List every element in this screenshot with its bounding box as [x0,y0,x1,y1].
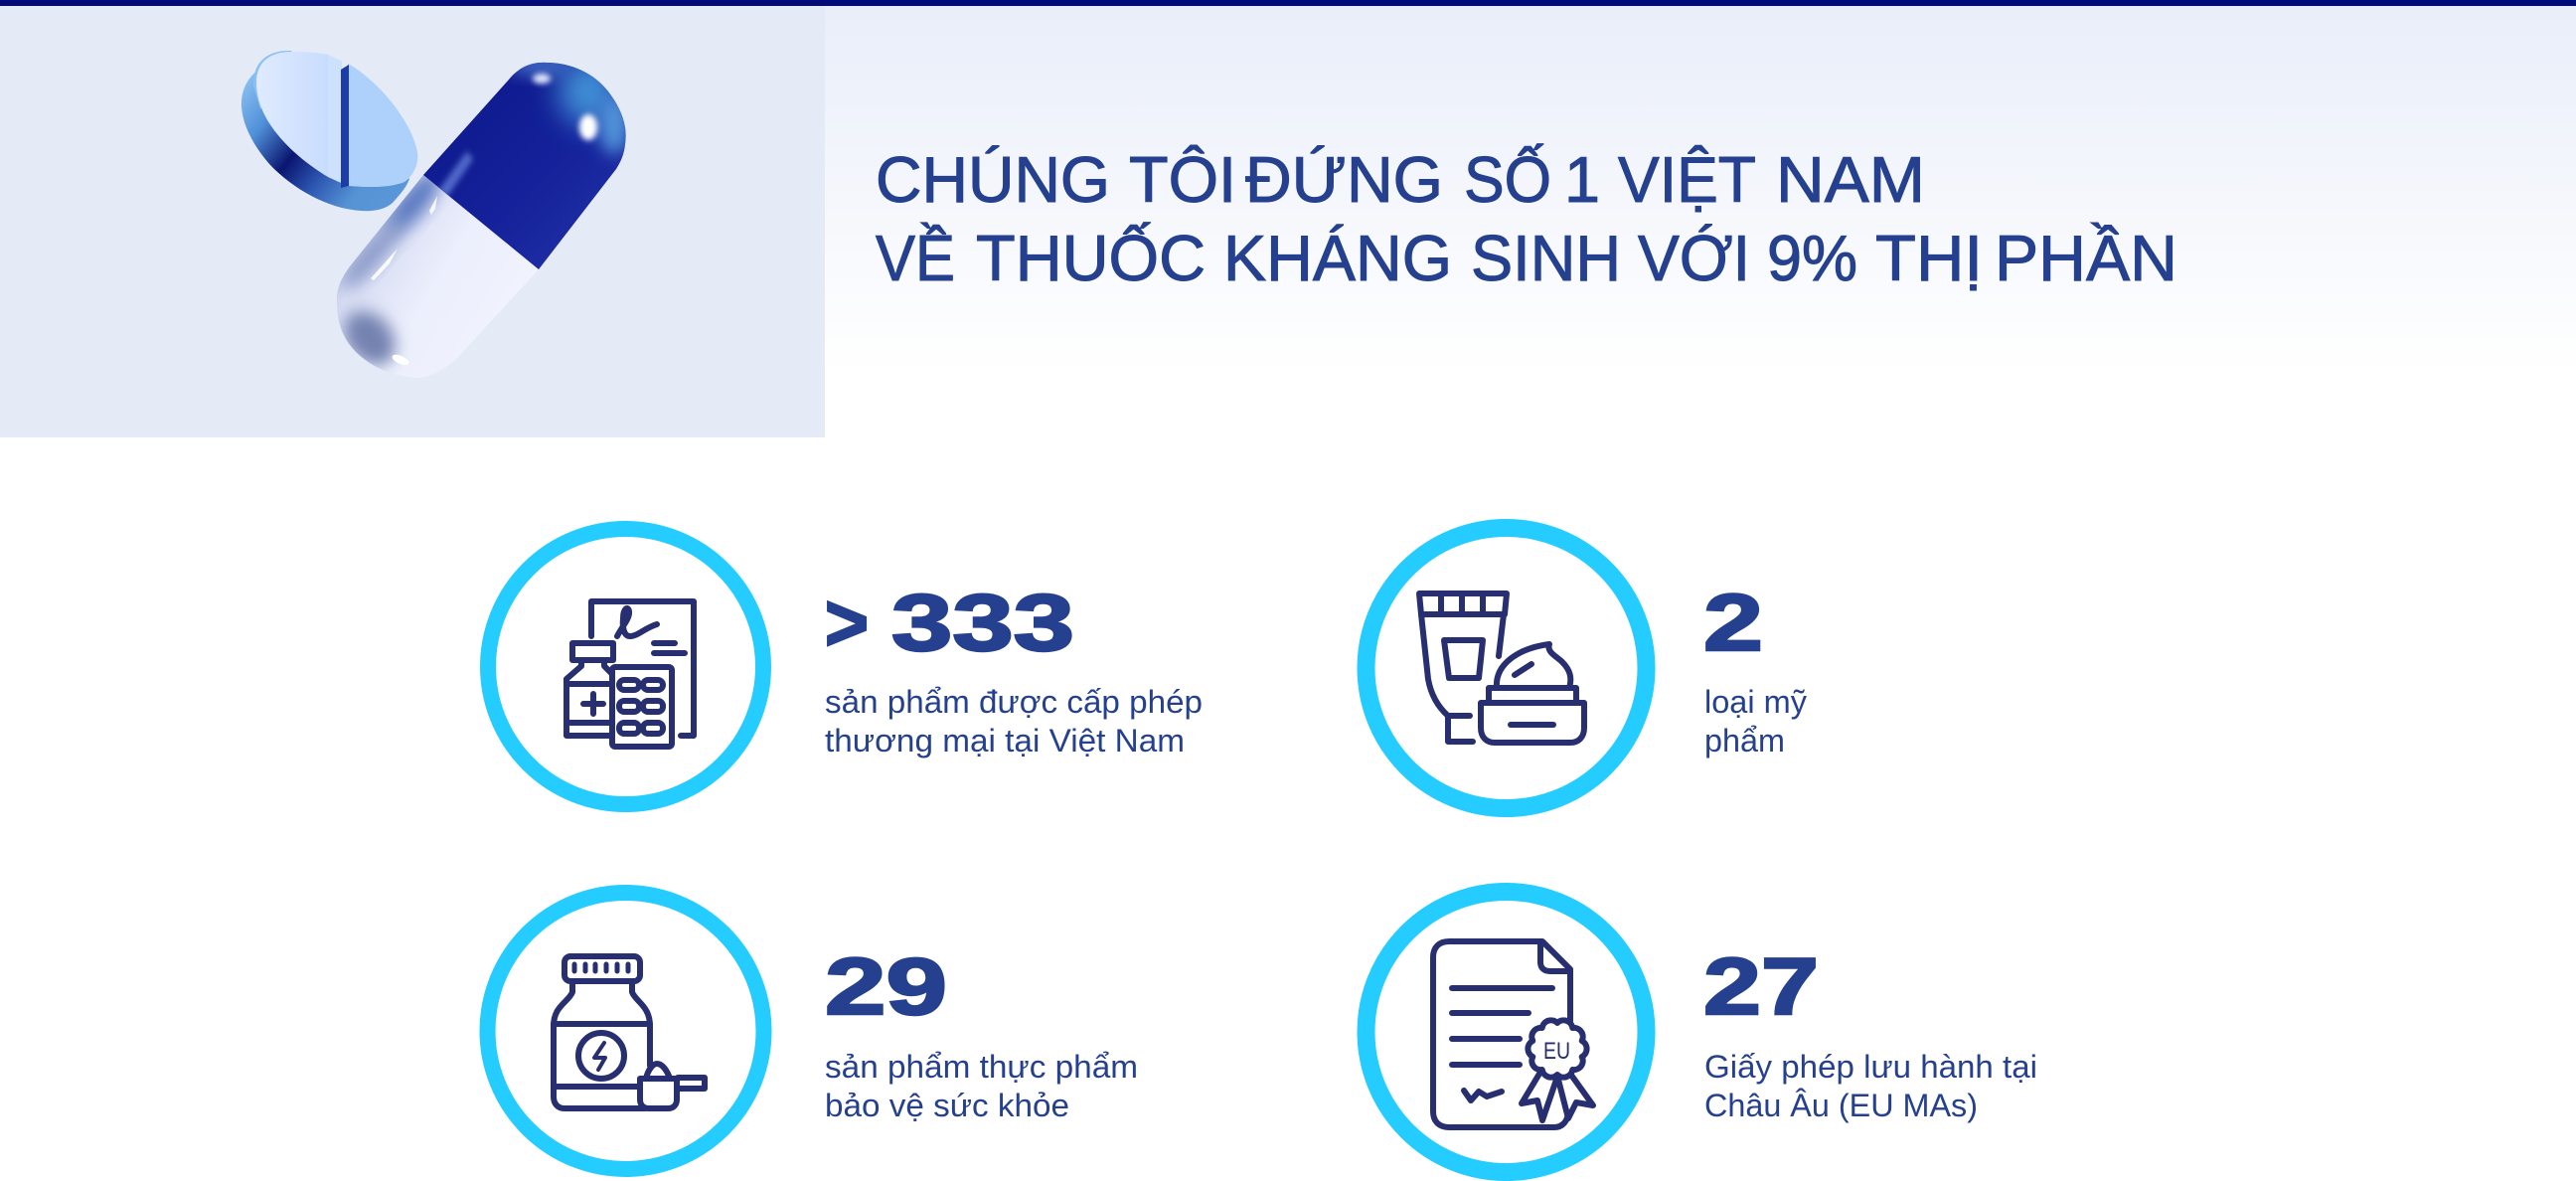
title: VIỆT [1618,143,1756,216]
description: loại mỹ [1704,684,1807,720]
icon: tablet [242,45,427,211]
number: 29 [825,942,947,1032]
title: CHÚNG [876,143,1110,216]
panel: stat 333 products [488,529,1203,804]
title: PHẦN [1995,222,2177,294]
title: TÔI [1129,143,1236,216]
panel: stat 27 EU licences [1366,892,2037,1172]
panel: stat 2 cosmetics [1366,528,1807,808]
icon: supplement bottle and scoop [554,956,705,1108]
description: bảo vệ sức khỏe [825,1088,1069,1123]
number: 2 [1703,579,1763,668]
description: phẩm [1704,723,1785,759]
icon: EU certificate [1433,941,1593,1127]
description [1704,684,1807,759]
title: NAM [1776,143,1925,216]
icon: tube and cream jar [1419,593,1584,743]
description: Châu Âu (EU MAs) [1704,1088,1978,1123]
number: 333 [891,579,1074,668]
description: sản phẩm được cấp phép [825,684,1203,720]
title: VỚI [1638,222,1750,294]
number: 27 [1703,942,1819,1032]
description: sản phẩm thực phẩm [825,1049,1138,1085]
icon: capsule [334,56,630,378]
seal label: EU [1543,1038,1570,1065]
title: KHÁNG [1223,222,1452,294]
title: VỀ [876,222,955,294]
description [825,1049,1138,1123]
description [1704,1049,2037,1123]
title: SỐ [1464,143,1551,216]
title: THUỐC [976,222,1206,294]
top bar [0,0,2576,6]
title: ĐỨNG [1245,143,1443,216]
description: Giấy phép lưu hành tại [1704,1049,2037,1085]
title [876,143,2177,294]
title: SINH [1471,222,1621,294]
number: > [825,579,869,668]
description: thương mại tại Việt Nam [825,723,1185,759]
panel: stat 29 supplements [487,893,1138,1169]
icon: prescription, bottle and blister [566,601,694,747]
number [825,579,1074,668]
description [825,684,1203,759]
panel: pill image [0,51,825,437]
title: 1 [1564,143,1600,216]
title: 9% [1767,222,1857,294]
title: THỊ [1875,222,1983,294]
header gradient background [0,6,2576,374]
